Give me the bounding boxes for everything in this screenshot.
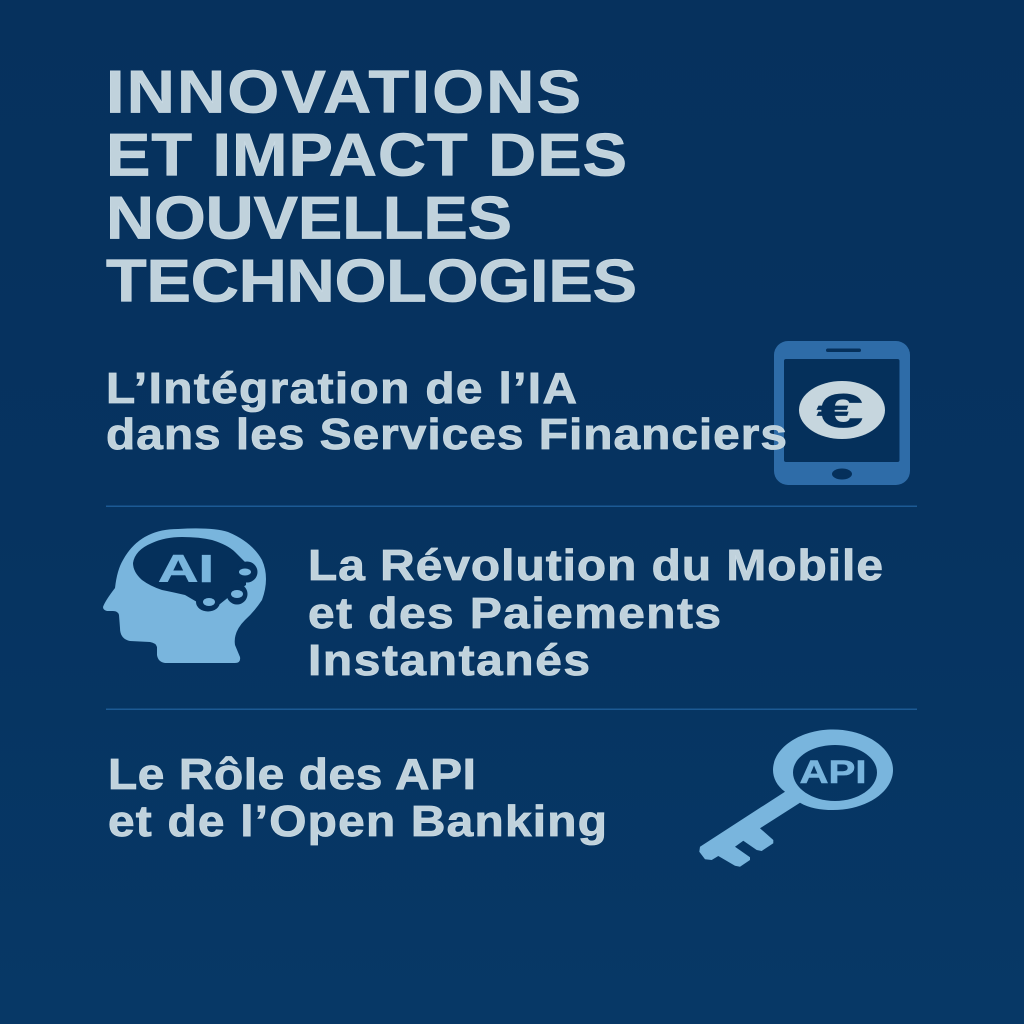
text: mobile revolution and instant payments: et des Paiements (308, 589, 721, 638)
text: role of APIs and open banking (108, 750, 607, 846)
title: TECHNOLOGIES (106, 247, 637, 315)
title: INNOVATIONS (106, 58, 581, 126)
title: NOUVELLES (106, 184, 512, 252)
text: mobile revolution and instant payments: La Révolution du Mobile (308, 541, 883, 590)
text: mobile revolution and instant payments (308, 541, 883, 685)
title (106, 58, 637, 315)
title: ET IMPACT DES (106, 121, 627, 189)
text: AI in financial services (106, 364, 787, 459)
icon: API key: API (800, 754, 866, 790)
text: role of APIs and open banking: et de l’Open Banking (108, 797, 607, 846)
icon: smartphone with euro coin: € (817, 384, 863, 437)
icon: API key (699, 730, 893, 867)
icon: head with AI: AI (158, 548, 214, 591)
text: mobile revolution and instant payments: Instantanés (308, 636, 590, 685)
text: AI in financial services: dans les Services Financiers (106, 410, 787, 459)
icon: head with AI (103, 528, 266, 663)
text: AI in financial services: L’Intégration de l’IA (106, 364, 577, 413)
icon: smartphone with euro coin (774, 341, 910, 485)
text: role of APIs and open banking: Le Rôle des API (108, 750, 476, 799)
